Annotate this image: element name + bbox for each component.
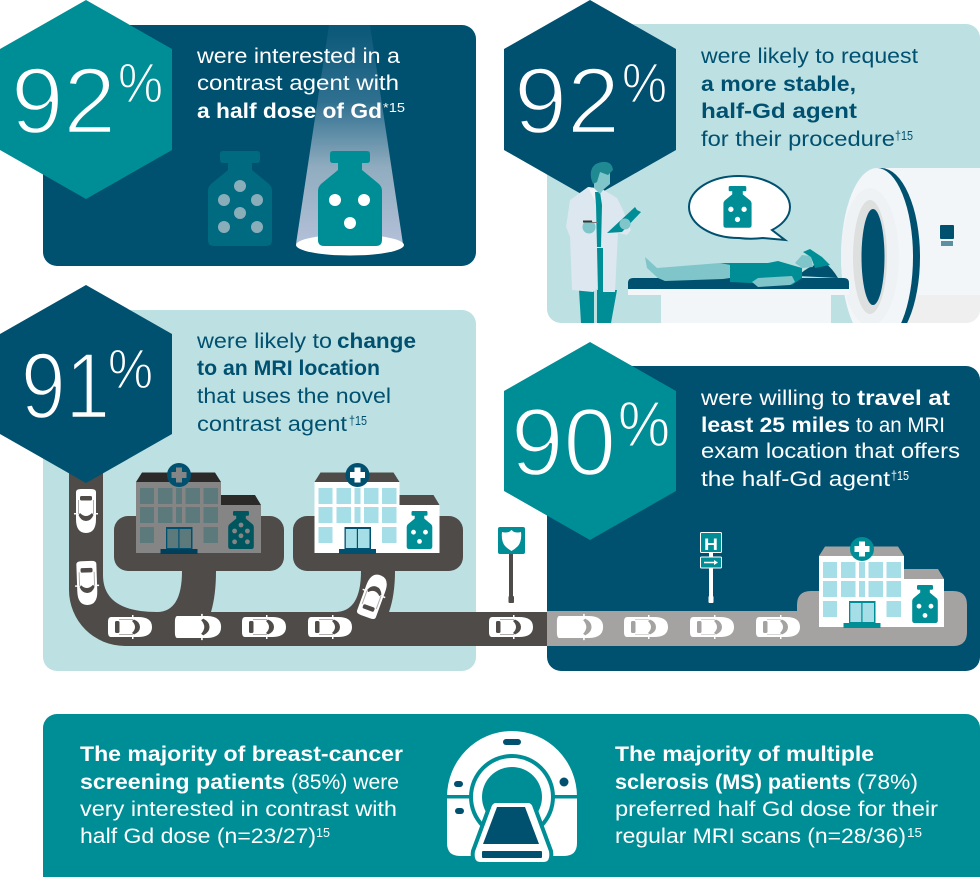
icon: highlighted bottle (318, 151, 382, 246)
text: request statement: half-Gd agent (701, 99, 857, 123)
text: half dose statement (196, 44, 405, 123)
text: travel statement: travel at (857, 386, 950, 410)
icon: dim bottle (208, 151, 272, 246)
text: MS patients: The majority of multiple (615, 742, 874, 766)
cars: grey road (557, 614, 800, 640)
text: travel statement: to an MRI (856, 413, 945, 437)
hexagon: 92 percent teal: % (118, 51, 163, 114)
spotlight beam (296, 25, 404, 256)
text: half dose statement: *15 (383, 100, 405, 115)
text: request statement: were likely to request (700, 44, 918, 68)
icon: MRI scanner (447, 731, 577, 864)
text: request statement (700, 44, 918, 151)
icon: bubble bottle (723, 186, 752, 228)
hexagon: 92 percent navy: % (622, 51, 667, 114)
text: change location statement: contrast agent (197, 412, 347, 436)
text: change location statement: that uses the novel (197, 384, 391, 408)
text: breast-cancer patients: very interested in contrast with (80, 797, 397, 821)
road sign: shield (498, 527, 525, 603)
text: travel statement: least 25 miles (701, 413, 850, 437)
MRI machine (841, 168, 980, 323)
text: breast-cancer patients: half Gd dose (n=23/27) (80, 824, 316, 848)
hexagon: 91 percent navy: % (108, 337, 153, 400)
road sign: hospital (700, 532, 722, 603)
text: request statement: a more stable, (701, 72, 856, 96)
road: dark route (69, 460, 547, 646)
speech bubble (689, 176, 790, 240)
hexagon: 92 percent teal (0, 0, 172, 199)
text: change location statement: to an MRI location (197, 356, 380, 380)
hexagon: 92 percent navy (504, 0, 676, 199)
text: travel statement: the half-Gd agent (701, 467, 890, 491)
hospital: grey (136, 463, 261, 554)
text: change location statement: †15 (349, 413, 367, 428)
text: MS patients: 15 (907, 825, 922, 840)
hexagon: 91 percent navy: 91 (21, 333, 110, 438)
hexagon: 90 percent teal (504, 342, 676, 540)
text: half dose statement: contrast agent with (197, 71, 399, 95)
text: change location statement: change (337, 329, 416, 353)
panel: 90% willing to travel (547, 366, 980, 671)
text: breast-cancer patients: The majority of breast-cancer (80, 742, 404, 766)
patient (645, 249, 838, 287)
text: travel statement: †15 (891, 468, 909, 483)
doctor (566, 162, 641, 323)
text: change location statement: were likely to (196, 329, 332, 353)
text: breast-cancer patients: (85%) were (291, 770, 399, 794)
hexagon: 92 percent teal: 92 (11, 48, 116, 153)
hexagon: 91 percent navy (0, 285, 172, 483)
hexagon: 92 percent navy: 92 (514, 48, 620, 153)
text: half dose statement: a half dose of Gd (197, 99, 382, 123)
hexagon: 90 percent teal: % (618, 388, 670, 460)
road sign: hospital: H (704, 535, 718, 554)
hospital: destination (819, 537, 944, 628)
text: MS patients: (78%) (857, 770, 918, 794)
hexagon: 90 percent teal: 90 (511, 389, 616, 496)
text: MS patients: regular MRI scans (n=28/36) (615, 824, 906, 848)
text: change location statement (196, 329, 416, 436)
panel: patient groups (43, 714, 980, 877)
panel: 91% change location (43, 310, 476, 671)
text: travel statement (700, 386, 960, 491)
patient table (628, 278, 849, 323)
parking lot 1 (114, 516, 284, 571)
parking lot 2 (293, 516, 463, 571)
text: breast-cancer patients: screening patients (80, 770, 285, 794)
hospital: white (314, 463, 440, 554)
cars: dark road (74, 489, 533, 640)
text: travel statement: exam location that offers (701, 439, 960, 463)
panel: 92% likely to request (547, 24, 980, 346)
text: request statement: †15 (895, 128, 913, 143)
panel: 92% half dose (43, 25, 476, 266)
text: breast-cancer patients: 15 (316, 825, 330, 840)
text: MS patients (615, 742, 938, 848)
text: half dose statement: were interested in a (196, 44, 400, 68)
road: grey route (547, 591, 967, 646)
text: travel statement: were willing to (700, 386, 851, 410)
text: breast-cancer patients (80, 742, 404, 848)
text: MS patients: preferred half Gd dose for their (615, 797, 938, 821)
text: request statement: for their procedure (701, 127, 895, 151)
text: MS patients: sclerosis (MS) patients (615, 770, 851, 794)
